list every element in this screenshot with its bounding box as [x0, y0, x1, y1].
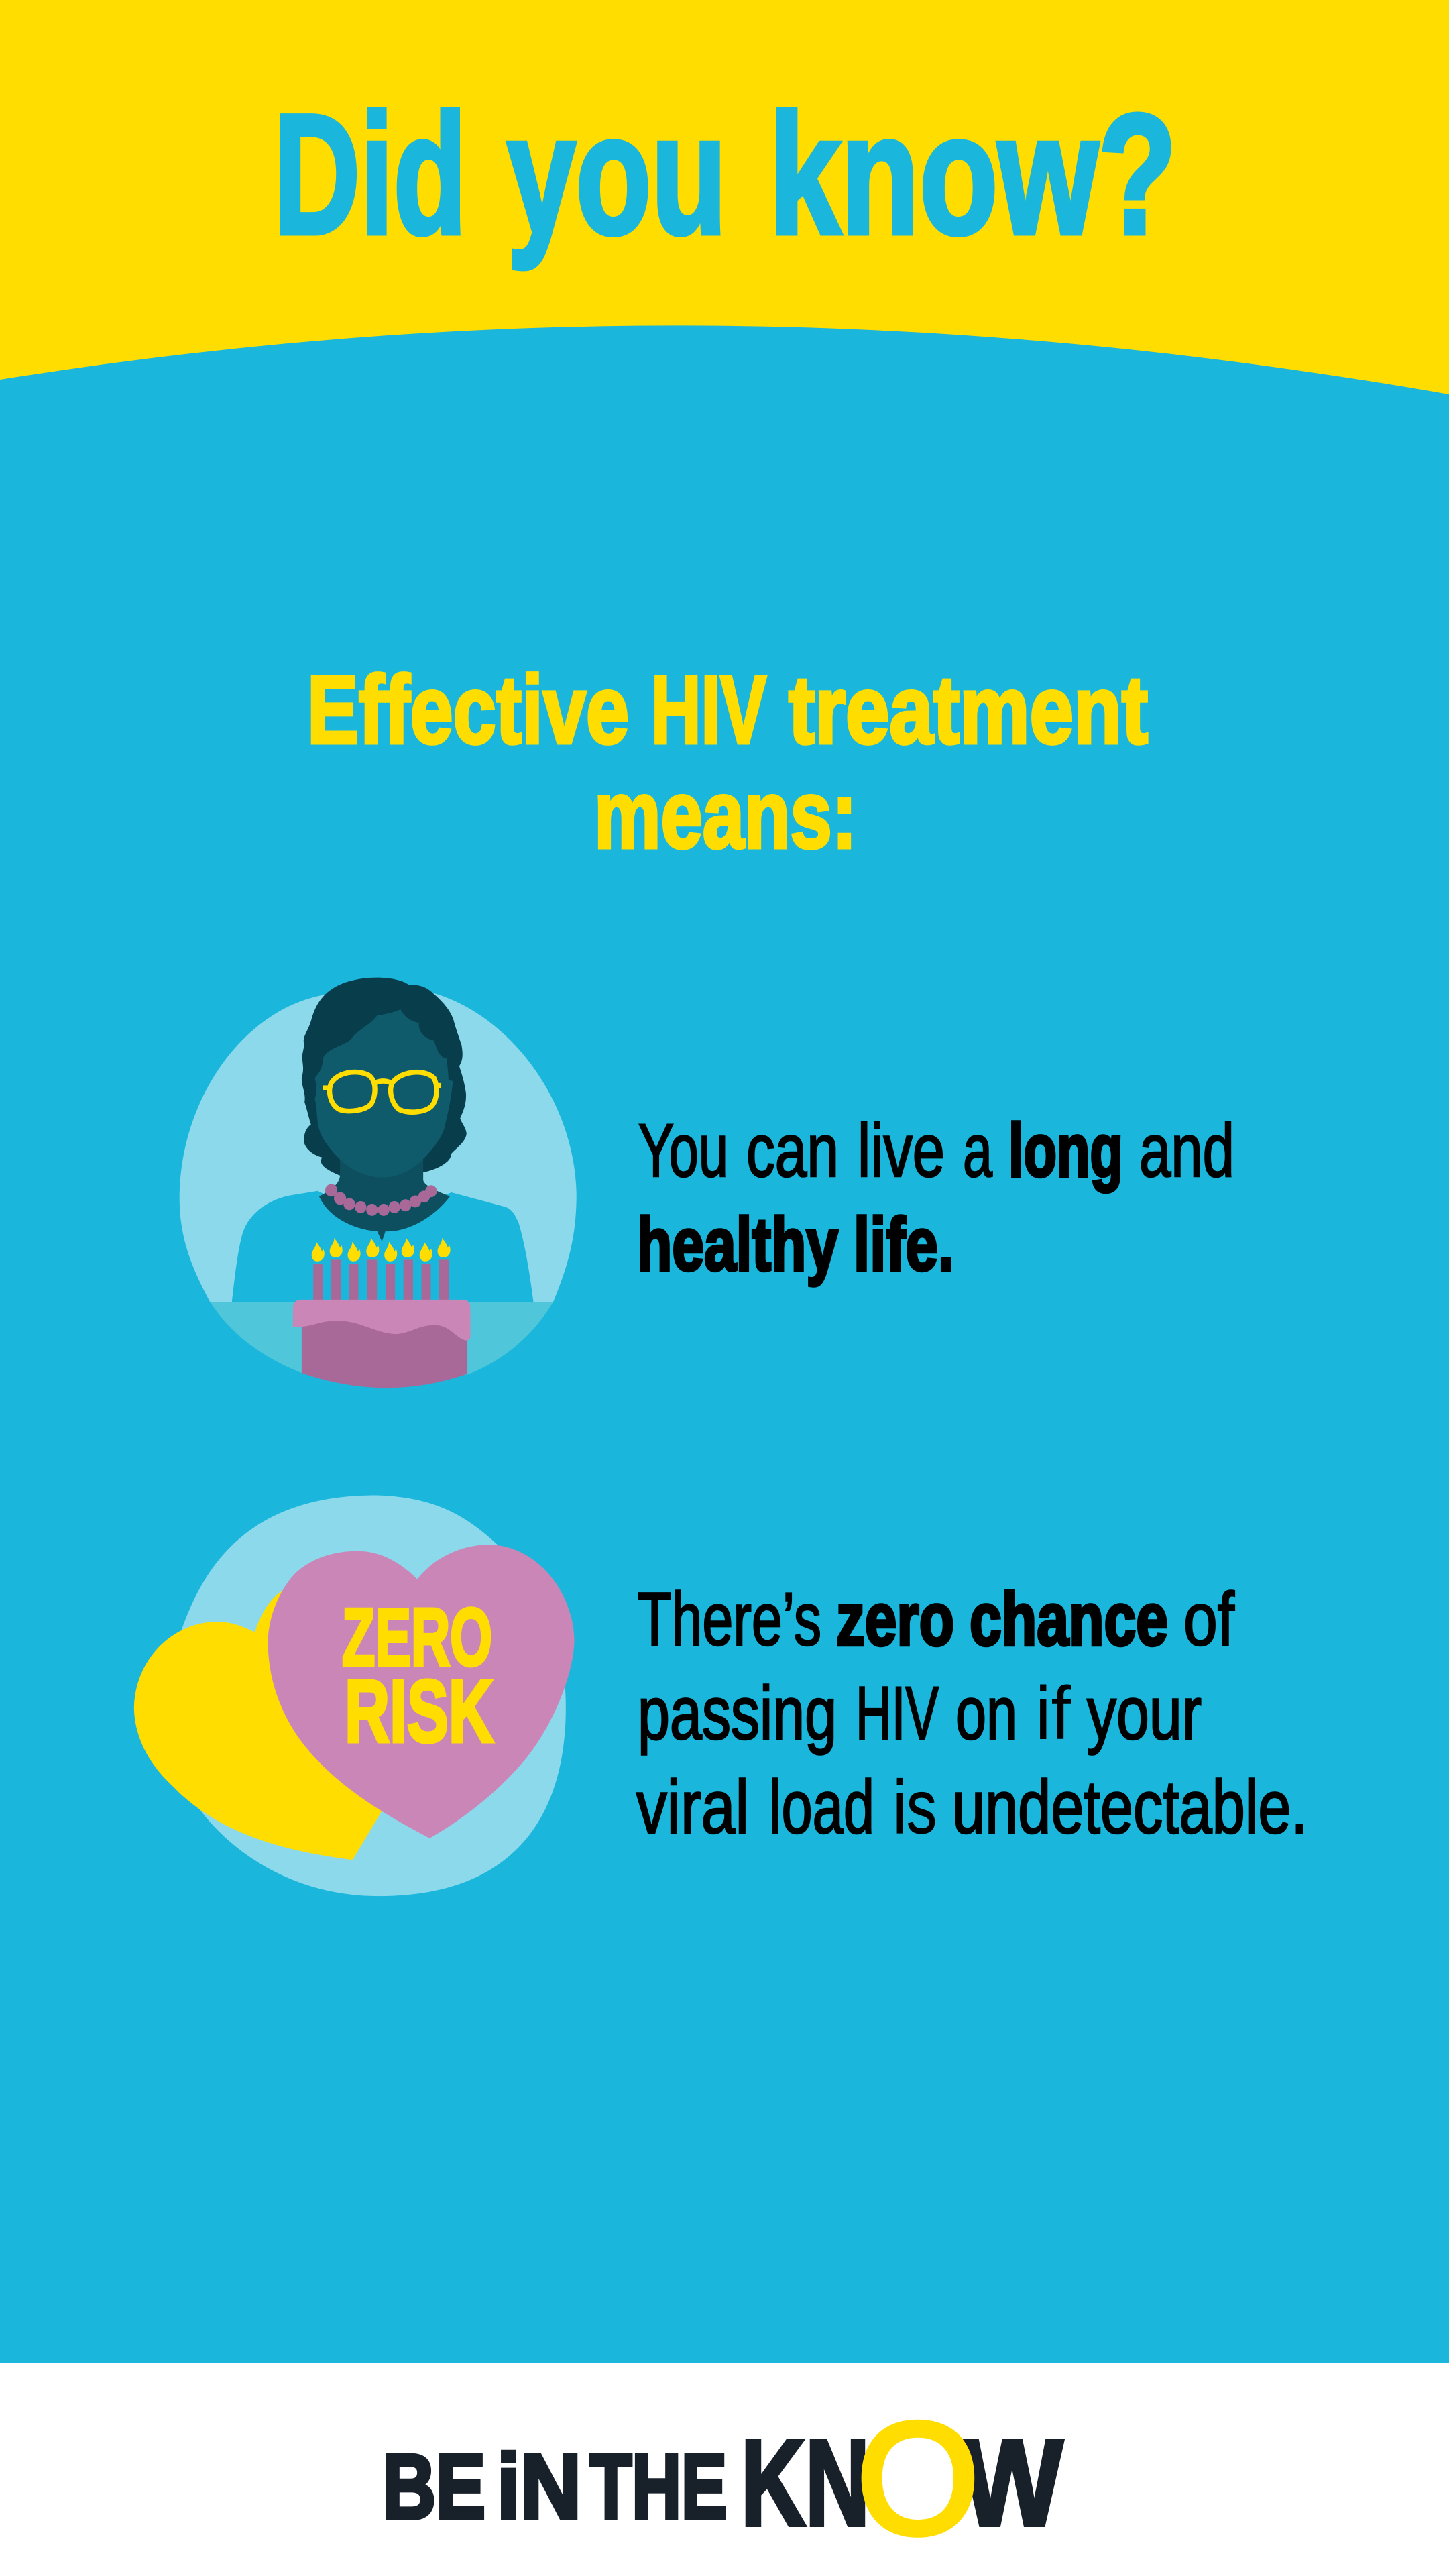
cardigan shoulders [232, 1191, 534, 1302]
title: Did [274, 79, 467, 270]
text: zero chance: of [1183, 1577, 1235, 1661]
zero risk label: RISK [345, 1662, 494, 1760]
text: long and healthy life: long [1008, 1109, 1123, 1192]
zero risk label [342, 1591, 494, 1760]
text: long and healthy life: healthy [637, 1202, 838, 1286]
text: zero chance: HIV [856, 1671, 939, 1755]
logo: be in the know [382, 2390, 1063, 2567]
subheading: treatment [789, 656, 1148, 764]
text: long and healthy life: live [858, 1109, 945, 1192]
cake icing [293, 1300, 470, 1341]
text: zero chance: viral [636, 1765, 749, 1849]
candles [313, 1259, 449, 1301]
table [210, 1302, 553, 1388]
text: long and healthy life: a [963, 1109, 992, 1192]
icon background blob [180, 993, 577, 1302]
logo: be in the know: BE [382, 2436, 485, 2538]
text: zero chance: undetectable. [952, 1765, 1308, 1849]
subheading: means: [594, 761, 857, 869]
cake base [302, 1321, 467, 1388]
text: zero chance: passing [638, 1671, 837, 1755]
neck and neckline [319, 1159, 450, 1241]
logo: be in the know: iN [497, 2436, 581, 2538]
logo: be in the know: THE [590, 2436, 727, 2538]
title: know? [769, 79, 1177, 270]
text: long and healthy life: life. [854, 1202, 954, 1286]
pink heart [268, 1545, 575, 1838]
zero risk label: ZERO [342, 1591, 492, 1683]
text: zero chance [636, 1577, 1308, 1849]
text: zero chance: is [893, 1765, 937, 1849]
text: zero chance: load [769, 1765, 874, 1849]
icon: zero risk hearts [134, 1495, 575, 1896]
text: zero chance: if [1035, 1671, 1071, 1755]
candle flames [312, 1238, 451, 1262]
yellow header banner [0, 0, 1449, 394]
text: zero chance: on [955, 1671, 1017, 1755]
pearl necklace [325, 1184, 437, 1216]
text: zero chance: your [1087, 1671, 1202, 1755]
subheading: Effective [307, 656, 629, 764]
subheading: HIV [651, 656, 766, 764]
text: long and healthy life: can [746, 1109, 839, 1192]
title: you [507, 79, 727, 270]
hair [302, 978, 467, 1176]
text: long and healthy life: You [638, 1109, 728, 1192]
glasses [323, 1072, 441, 1112]
subheading [307, 656, 1148, 869]
logo: be in the know: W [962, 2414, 1063, 2551]
title [274, 79, 1177, 270]
text: zero chance: chance [970, 1577, 1168, 1661]
logo: be in the know: O [857, 2390, 979, 2567]
text: long and healthy life [637, 1109, 1234, 1286]
text: long and healthy life: and [1139, 1109, 1234, 1192]
icon background blob [182, 1495, 566, 1896]
yellow heart [134, 1591, 385, 1860]
text: zero chance: zero [836, 1577, 954, 1661]
face [314, 1009, 453, 1178]
icon: older woman with birthday cake [180, 978, 577, 1388]
logo: be in the know: KN [741, 2414, 870, 2551]
white footer panel [0, 2363, 1449, 2576]
text: zero chance: There’s [638, 1577, 821, 1661]
